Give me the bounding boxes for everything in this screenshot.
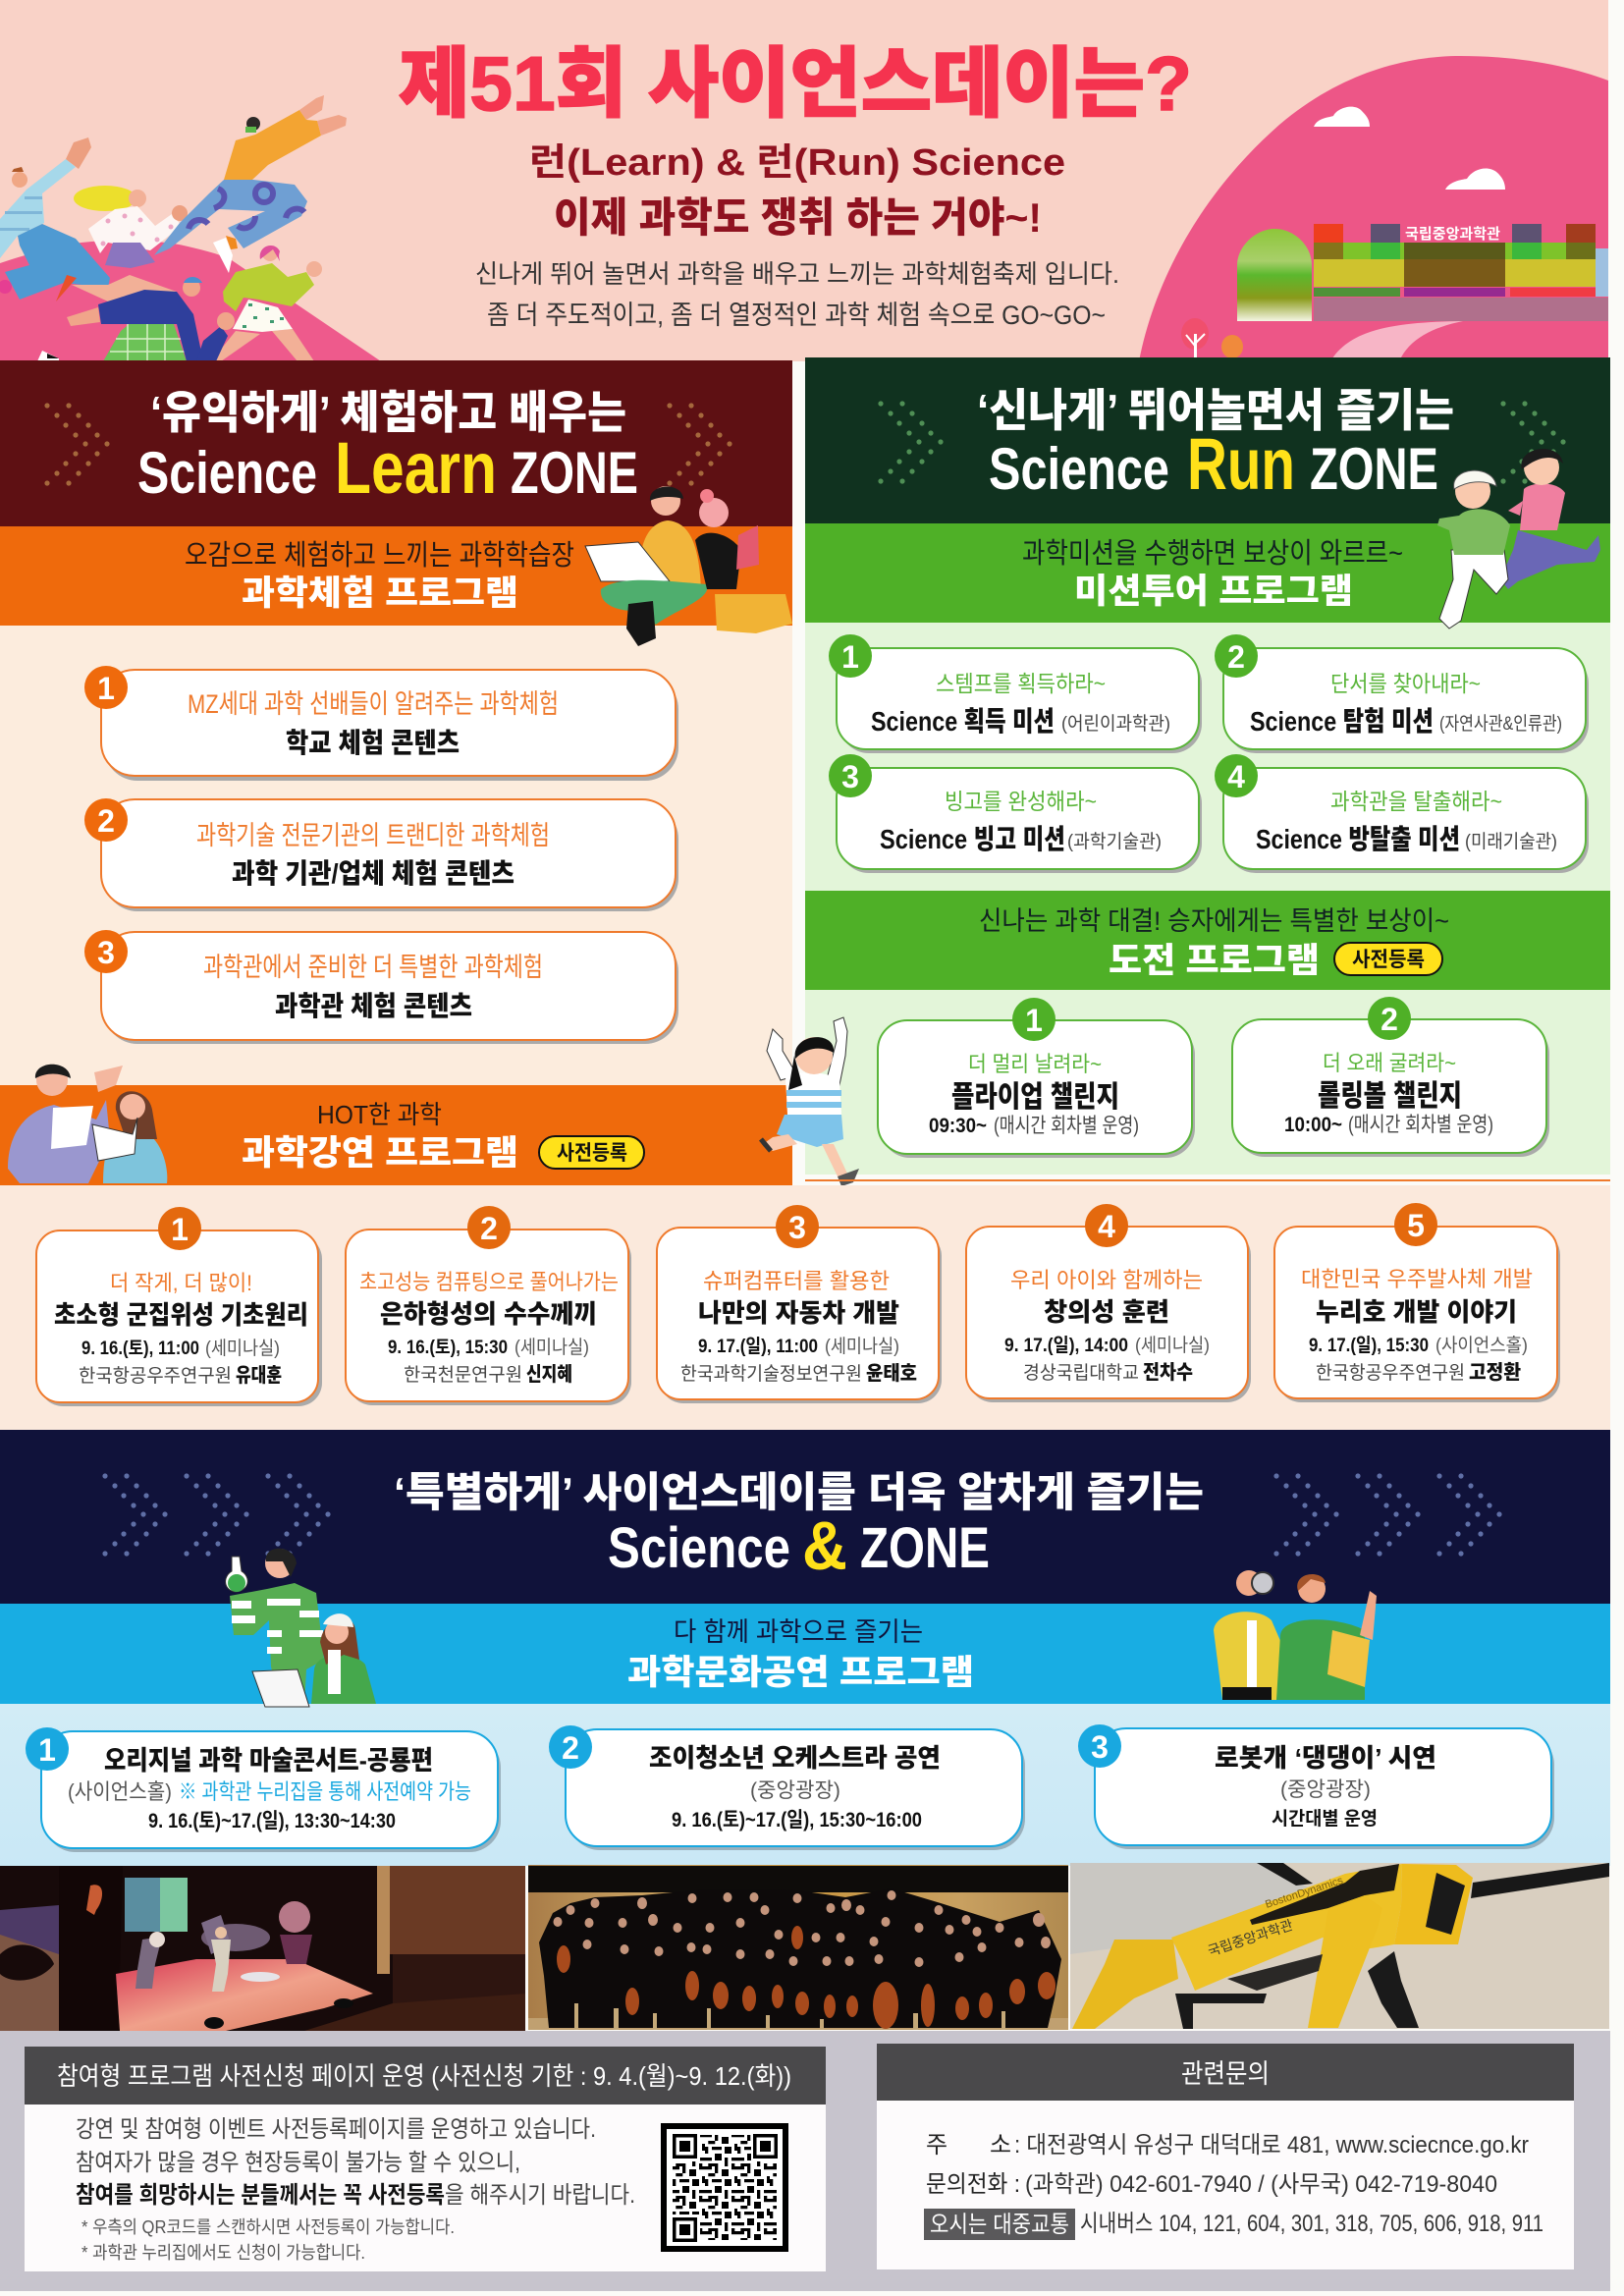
text: mission 4 name: Science 방탈출 미션 [1256, 824, 1460, 854]
text: card 2 name: 과학 기관/업체 체험 콘텐츠 [232, 858, 514, 889]
text [1004, 1268, 1210, 1384]
illustration: small trees [1181, 318, 1243, 358]
text: note 1: * 우측의 QR코드를 스캔하시면 사전등록이 가능합니다. [81, 2217, 455, 2237]
text: 나만의 자동차 개발 [698, 1298, 899, 1328]
decorative dots: run right [1500, 401, 1566, 484]
text: 고정환 [1469, 1361, 1521, 1384]
text: challenge intro: 신나는 과학 대결! 승자에게는 특별한 보상이~ [979, 906, 1449, 936]
illustration: running kids [1437, 449, 1600, 629]
text: concert time: 9. 16.(토)~17.(일), 13:30~14:30 [148, 1810, 396, 1832]
text: registration line 1: 강연 및 참여형 이벤트 사전등록페이지를 운영하고 있습니다. [76, 2116, 596, 2143]
card: rolling ball challenge [1232, 997, 1549, 1157]
number badge [829, 754, 872, 797]
text: mission 2 name: Science 탐험 미션 [1250, 706, 1434, 737]
card: lecture 4 [966, 1204, 1251, 1402]
number badge 2: 2 [97, 803, 115, 839]
icon: clouds [1314, 107, 1505, 190]
text [54, 1271, 308, 1387]
number badge: 4 [1227, 759, 1245, 794]
badge: pre-registration: 사전등록 [1352, 949, 1425, 971]
text: (사이언스홀) [1435, 1335, 1528, 1356]
text: 한국항공우주연구원 [79, 1365, 232, 1387]
text: mission tour intro: 과학미션을 수행하면 보상이 와르르~ [1022, 537, 1403, 570]
number badge 2 [84, 798, 128, 842]
number badge [158, 1207, 201, 1250]
text: concert note: ※ 과학관 누리집을 통해 사전예약 가능 [179, 1779, 471, 1804]
number badge [26, 1727, 69, 1771]
number badge: 5 [1407, 1208, 1425, 1243]
number badge: 2 [562, 1730, 579, 1766]
panel: header [0, 0, 1608, 361]
number badge: 4 [1098, 1209, 1115, 1244]
text: 한국항공우주연구원 [1316, 1362, 1465, 1384]
text: mission 1 venue: (어린이과학관) [1061, 713, 1170, 735]
illustration: flask scientists [226, 1549, 376, 1707]
heading: experience program: 과학체험 프로그램 [242, 574, 518, 613]
card: institution experience [84, 798, 678, 911]
text: card 1 name: 학교 체험 콘텐츠 [286, 728, 460, 758]
heading: lecture program: 과학강연 프로그램 [242, 1134, 518, 1173]
text: mission 3 venue: (과학기술관) [1067, 831, 1162, 852]
heading: run zone: ‘신나게’ 뛰어놀면서 즐기는 [977, 385, 1454, 436]
card: magic concert [26, 1727, 501, 1852]
text: rolling time: 10:00~ [1284, 1114, 1342, 1136]
text: 9. 16.(토), 11:00 [81, 1339, 199, 1359]
text: culture program intro: 다 함께 과학으로 즐기는 [674, 1617, 923, 1647]
text: address: 주 [926, 2132, 947, 2159]
panel: contact [877, 2044, 1574, 2269]
heading: pre-registration: 참여형 프로그램 사전신청 페이지 운영 (사전신청 기한 : 9. 4.(월)~9. 12.(화)) [57, 2061, 791, 2091]
number badge [1215, 754, 1258, 797]
text: 유대훈 [236, 1364, 282, 1387]
number badge [1215, 634, 1258, 678]
text: 누리호 개발 이야기 [1316, 1297, 1517, 1327]
text: description line 2: 좀 더 주도적이고, 좀 더 열정적인 과학 체험 속으로 GO~GO~ [487, 301, 1106, 330]
text: rolling name: 롤링볼 챌린지 [1318, 1080, 1462, 1113]
decorative dots: learn right [667, 403, 732, 486]
text: robot venue: (중앙광장) [1280, 1778, 1371, 1801]
text: rolling caption: 더 오래 굴려라~ [1323, 1051, 1456, 1075]
text: card 3 name: 과학관 체험 콘텐츠 [275, 991, 472, 1021]
text: address: 소 [990, 2132, 1011, 2159]
card: mission 2 [1215, 634, 1589, 753]
heading: mission tour: 미션투어 프로그램 [1074, 573, 1353, 611]
text: mission 3 caption: 빙고를 완성해라~ [945, 789, 1097, 814]
text: mission 2 caption: 단서를 찾아내라~ [1330, 671, 1481, 696]
text: note 2: * 과학관 누리집에서도 신청이 가능합니다. [81, 2243, 365, 2263]
text: address: : 대전광역시 유성구 대덕대로 481, www.sciecnce.go.kr [1014, 2132, 1529, 2159]
heading: science run zone: Run [1187, 423, 1295, 505]
text: public transport: 시내버스 104, 121, 604, 301, 318, 705, 606, 918, 911 [1080, 2211, 1543, 2237]
number badge: 1 [171, 1212, 189, 1247]
text: mission 2 venue: (자연사관&인류관) [1439, 713, 1562, 735]
text: 한국과학기술정보연구원 [680, 1363, 862, 1385]
badge: pre-registration: 사전등록 [557, 1142, 627, 1165]
number badge [776, 1205, 819, 1248]
text: 전차수 [1143, 1361, 1193, 1384]
text: flyup time [929, 1115, 1139, 1137]
text: concert venue: (사이언스홀) [68, 1779, 172, 1804]
text: experience program intro: 오감으로 체험하고 느끼는 과학학습장 [185, 539, 574, 572]
text: card 3 caption: 과학관에서 준비한 더 특별한 과학체험 [203, 953, 543, 982]
text: description line 1: 신나게 뛰어 놀면서 과학을 배우고 느끼는 과학체험축제 입니다. [475, 259, 1119, 289]
number badge [1394, 1203, 1437, 1246]
subtitle: learn and run: 런(Learn) & 런(Run) Science [529, 142, 1065, 184]
text: flyup caption: 더 멀리 날려라~ [968, 1052, 1102, 1076]
text: rolling time: (매시간 회차별 운영) [1348, 1114, 1493, 1136]
text: 슈퍼컴퓨터를 활용한 [703, 1269, 890, 1293]
text: robot name: 로봇개 ‘댕댕이’ 시연 [1215, 1743, 1436, 1773]
text: 경상국립대학교 [1023, 1362, 1139, 1384]
panel: run zone [805, 357, 1610, 1175]
heading: contact: 관련문의 [1181, 2059, 1270, 2089]
badge: pre-registration [539, 1136, 644, 1169]
text: 9. 16.(토), 15:30 [388, 1338, 508, 1358]
heading: special zone: ‘특별하게’ 사이언스데이를 더욱 알차게 즐기는 [394, 1469, 1204, 1515]
photo: robot dog [1070, 1863, 1609, 2029]
number badge: 3 [788, 1210, 806, 1245]
decorative dots: run left [878, 401, 944, 484]
number badge [829, 634, 872, 678]
number badge [1012, 998, 1056, 1041]
heading: science run zone [989, 423, 1438, 505]
number badge: 2 [1380, 1002, 1398, 1037]
text: (세미나실) [514, 1337, 589, 1358]
number badge: 2 [1227, 639, 1245, 675]
number badge 3 [84, 930, 128, 973]
text: flyup time: (매시간 회차별 운영) [994, 1115, 1139, 1137]
text: 은하형성의 수수께끼 [380, 1299, 597, 1329]
text: (세미나실) [825, 1336, 899, 1357]
text: 9. 17.(일), 14:00 [1004, 1335, 1128, 1356]
heading: science learn zone: Learn [335, 427, 497, 509]
text: (세미나실) [1135, 1335, 1210, 1356]
heading: science learn zone: Science [137, 440, 317, 506]
text: 신지혜 [526, 1363, 572, 1386]
text: 대한민국 우주발사체 개발 [1301, 1267, 1533, 1291]
text: 초고성능 컴퓨팅으로 풀어나가는 [359, 1270, 619, 1294]
illustration: right pink hill [1139, 56, 1608, 361]
text: hot science: HOT한 과학 [317, 1100, 442, 1129]
number badge: 2 [480, 1211, 498, 1246]
number badge: 1 [841, 639, 859, 675]
panel: lecture list [0, 1185, 1610, 1430]
number badge: 1 [1025, 1003, 1043, 1038]
text: mission 3 name: Science 빙고 미션 [880, 824, 1065, 854]
heading: science run zone: Science [989, 436, 1169, 502]
number badge: 3 [841, 759, 859, 794]
text: public transport: 오시는 대중교통 [930, 2212, 1069, 2238]
text: 9. 17.(일), 15:30 [1309, 1335, 1429, 1356]
illustration: reading couple [585, 486, 792, 646]
illustration: science museum building [1237, 224, 1608, 321]
card: museum experience [84, 930, 678, 1044]
card: robot dog [1078, 1724, 1554, 1849]
panel: science and zone [0, 1430, 1610, 1866]
text [359, 1270, 619, 1386]
illustration: left hill [0, 241, 381, 361]
subtitle: slogan: 이제 과학도 쟁취 하는 거야~! [554, 194, 1042, 241]
panel: learn zone [0, 360, 792, 1185]
number badge 1 [84, 666, 128, 709]
text: 우리 아이와 함께하는 [1010, 1268, 1203, 1292]
text: orchestra venue: (중앙광장) [750, 1779, 840, 1802]
number badge 3: 3 [97, 935, 115, 970]
illustration: road [1330, 321, 1463, 361]
text: registration line 3: 을 해주시기 바랍니다. [445, 2182, 635, 2209]
badge: pre-registration [1334, 943, 1442, 975]
illustration: magnifier explorers [1214, 1570, 1377, 1700]
decorative dots: left [102, 1473, 331, 1557]
illustration: science museum building: 국립중앙과학관 [1405, 226, 1500, 243]
text: registration line 2: 참여자가 많을 경우 현장등록이 불가능 할 수 있으니, [76, 2150, 520, 2176]
photo: youth orchestra [528, 1865, 1068, 2030]
card: lecture 1 [36, 1207, 322, 1406]
text: 윤태호 [866, 1362, 917, 1385]
text: 9. 17.(일), 11:00 [698, 1336, 818, 1357]
text: orchestra time: 9. 16.(토)~17.(일), 15:30~16:00 [672, 1809, 922, 1831]
illustration: jumping girl [761, 1017, 859, 1186]
text: flyup name: 플라이업 챌린지 [951, 1081, 1119, 1114]
photo: magic concert stage [0, 1866, 526, 2031]
heading: science and zone: ZONE [860, 1516, 990, 1580]
photo: robot dog: 국립중앙과학관 [1206, 1917, 1295, 1959]
number badge 1: 1 [97, 671, 115, 706]
heading: science and zone [608, 1507, 990, 1584]
text [1301, 1267, 1533, 1384]
heading: science run zone: ZONE [1310, 436, 1438, 502]
text: mission 1 name: Science 획득 미션 [871, 706, 1055, 737]
card: mission 3 [829, 754, 1202, 873]
text: mission 1 caption: 스템프를 획득하라~ [936, 671, 1106, 696]
text: rolling time [1284, 1114, 1493, 1136]
text: robot time: 시간대별 운영 [1272, 1808, 1378, 1830]
number badge [1085, 1204, 1128, 1247]
number badge: 3 [1091, 1729, 1109, 1765]
text: card 2 caption: 과학기술 전문기관의 트랜디한 과학체험 [196, 821, 550, 850]
illustration: running crowd [0, 95, 347, 361]
divider line: orange [805, 1179, 1610, 1181]
heading: science and zone: & [802, 1507, 847, 1584]
icon: QR code [661, 2123, 788, 2252]
text: concert name: 오리지널 과학 마술콘서트-공룡편 [104, 1746, 433, 1776]
number badge [467, 1206, 511, 1249]
number badge [549, 1725, 592, 1769]
number badge [1078, 1724, 1121, 1768]
text: public transport [924, 2209, 1543, 2240]
heading: science learn zone: ZONE [511, 440, 638, 506]
text [680, 1269, 917, 1385]
panel: pre-registration [25, 2047, 826, 2271]
card: lecture 3 [657, 1205, 942, 1403]
decorative dots: right [1273, 1473, 1502, 1557]
card: lecture 2 [346, 1206, 631, 1405]
text: 초소형 군집위성 기초원리 [54, 1300, 308, 1330]
text: 한국천문연구원 [404, 1364, 522, 1386]
decorative dots: learn left [44, 403, 110, 486]
heading: culture program: 과학문화공연 프로그램 [627, 1654, 974, 1692]
text: (세미나실) [205, 1338, 280, 1359]
text: mission 4 venue: (미래기술관) [1465, 831, 1557, 852]
card: mission 4 [1215, 754, 1589, 873]
panel: footer background [0, 2031, 1610, 2291]
text: 창의성 훈련 [1044, 1297, 1169, 1327]
heading: science learn zone [137, 427, 638, 509]
card: school experience [84, 666, 678, 781]
text: phone: (과학관) 042-601-7940 / (사무국) 042-719-8040 [1025, 2171, 1497, 2198]
text: orchestra name: 조이청소년 오케스트라 공연 [649, 1743, 941, 1773]
text: mission 4 caption: 과학관을 탈출해라~ [1330, 789, 1502, 814]
card: lecture 5 [1274, 1203, 1560, 1402]
text: phone: 문의전화 : [926, 2171, 1020, 2198]
photo: robot dog: BostonDynamics [1264, 1875, 1345, 1911]
card: mission 1 [829, 634, 1202, 753]
text: registration line 3: 참여를 희망하시는 분들께서는 꼭 사전등록 [76, 2182, 445, 2209]
heading: challenge program: 도전 프로그램 [1109, 942, 1320, 980]
heading: learn zone: ‘유익하게’ 체험하고 배우는 [150, 387, 626, 438]
number badge [1368, 997, 1411, 1040]
card: flyup challenge [878, 998, 1195, 1158]
card: youth orchestra [549, 1725, 1025, 1850]
text: card 1 caption: MZ세대 과학 선배들이 알려주는 과학체험 [188, 689, 559, 719]
number badge: 1 [38, 1732, 56, 1768]
text: flyup time: 09:30~ [929, 1115, 987, 1137]
text: 더 작게, 더 많이! [110, 1271, 252, 1295]
title: 제51회 사이언스데이는? [399, 40, 1192, 127]
heading: science and zone: Science [608, 1516, 790, 1580]
illustration: lecture couple [8, 1065, 167, 1183]
